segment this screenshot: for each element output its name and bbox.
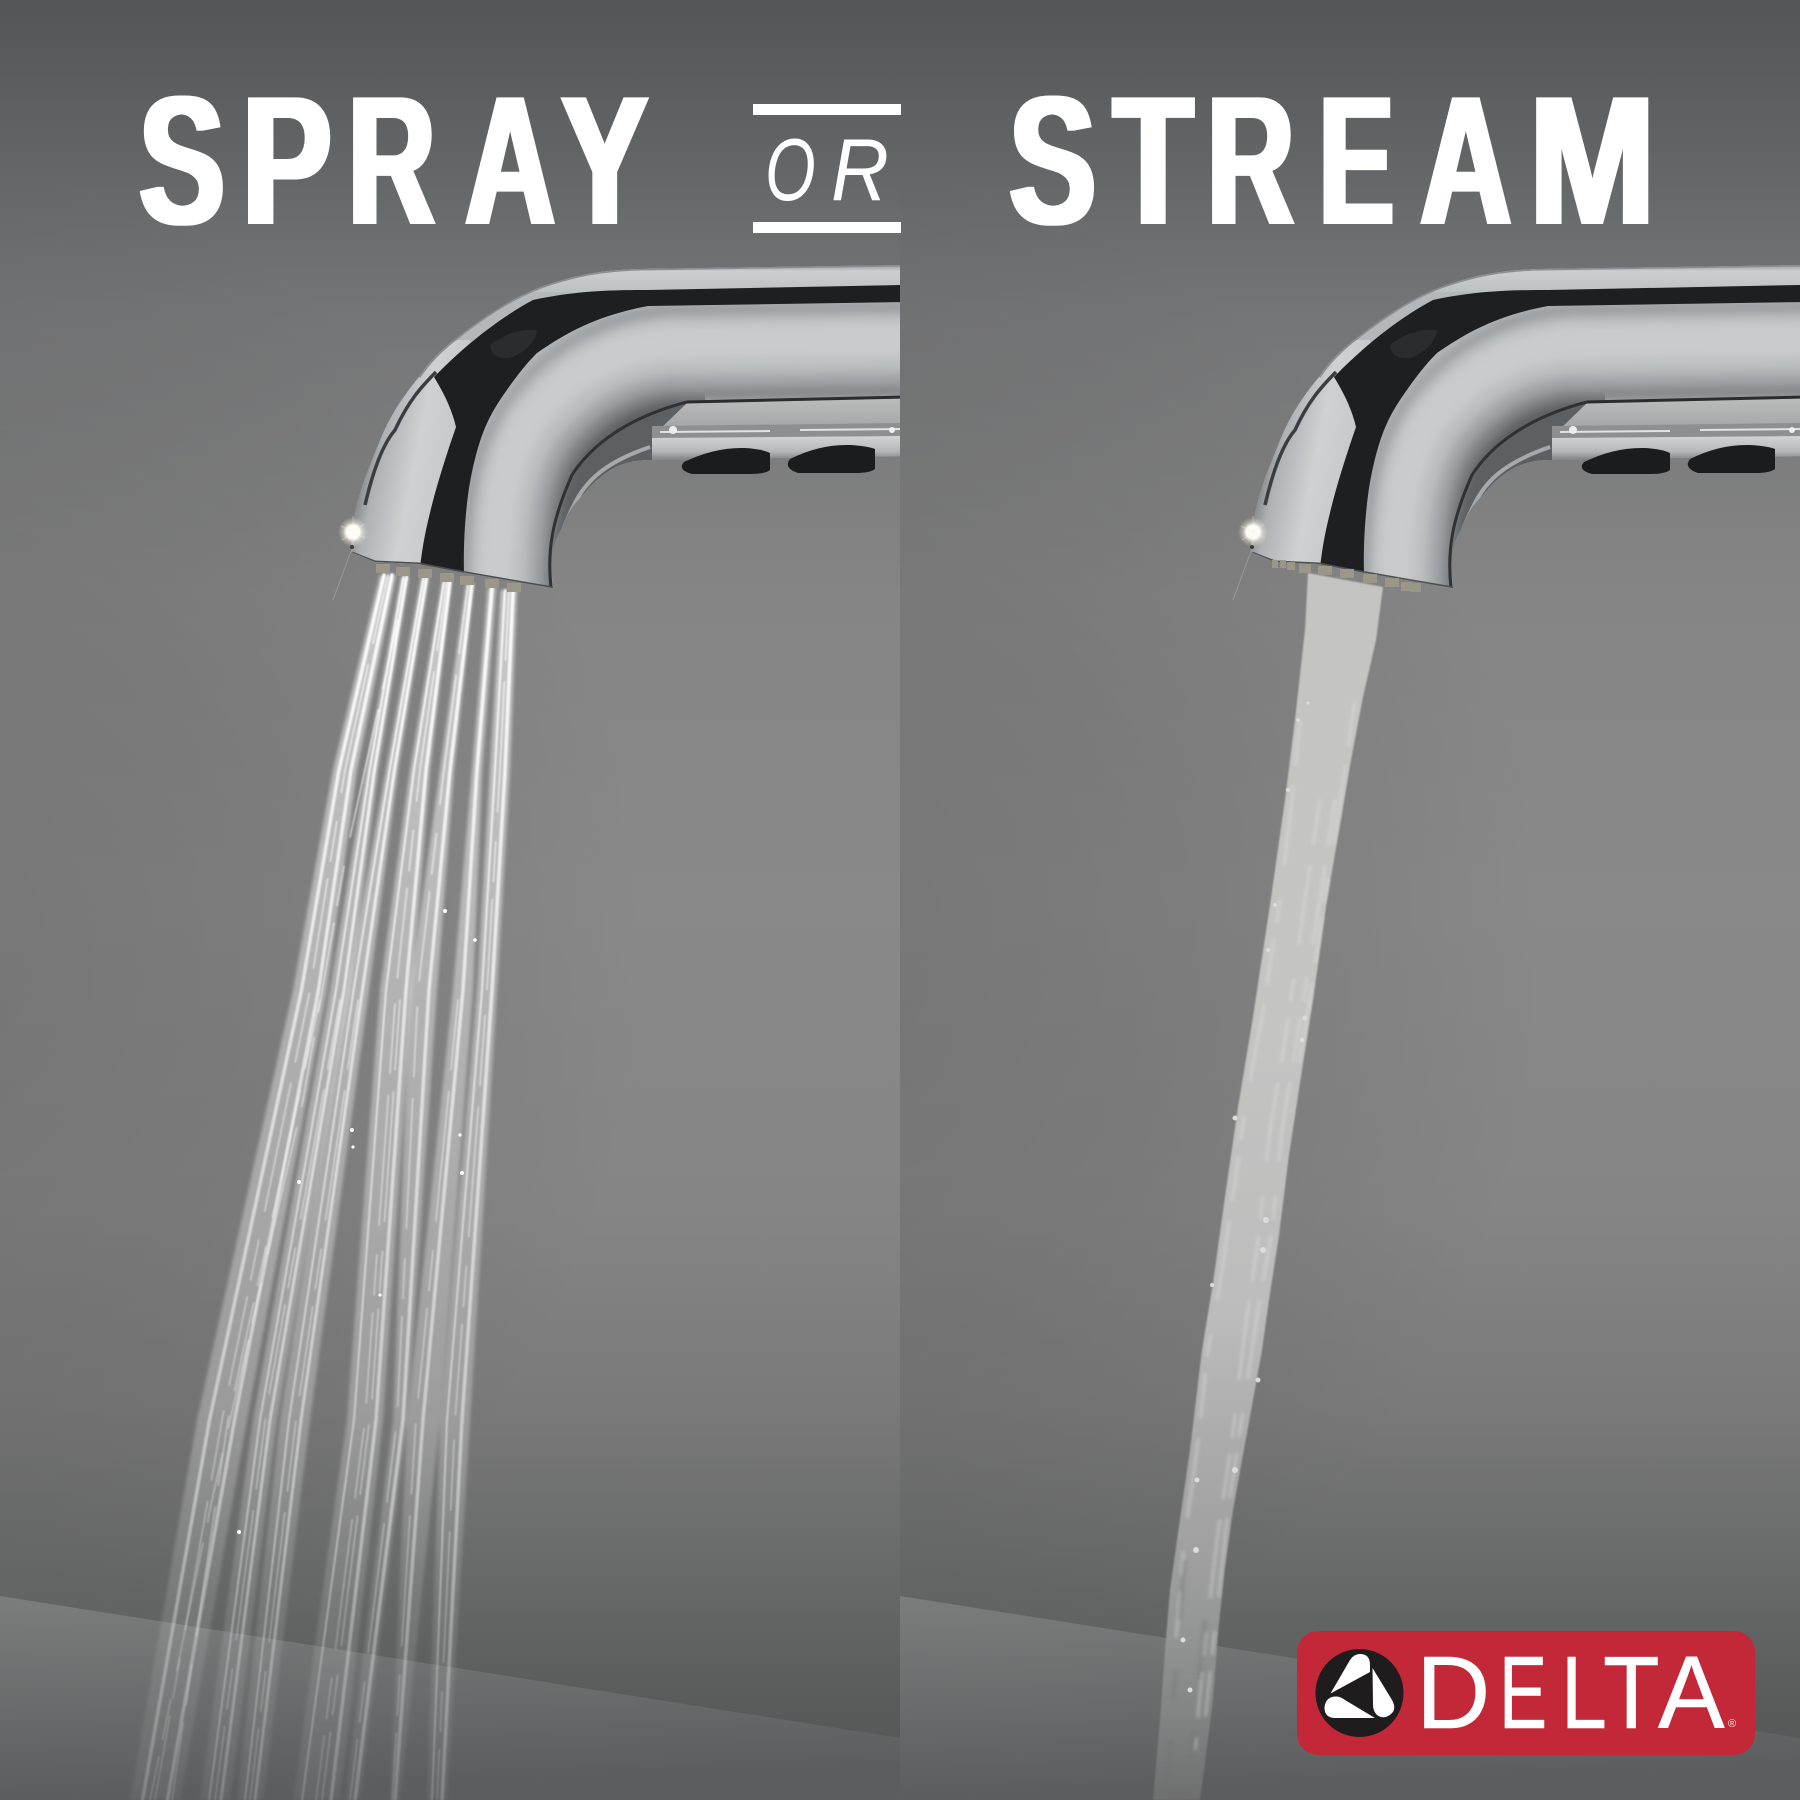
title: SPRAY [139,57,650,263]
faucet spout, left [332,265,900,600]
title: STREAM: M [1529,57,1655,263]
wordmark: DELTA: A [1658,1635,1725,1750]
wordmark: DELTA: D [1416,1635,1490,1750]
title: STREAM [1009,57,1655,263]
faucet spout, right [1233,260,1800,630]
title: STREAM: S [1009,57,1096,263]
wordmark: DELTA: ® [1728,1718,1736,1730]
title: SPRAY: P [242,57,332,263]
wordmark: DELTA: L [1561,1635,1607,1750]
wall and countertop background [900,0,1800,1800]
title connector: OR between two rules: R [831,120,889,219]
wordmark: DELTA: E [1499,1635,1547,1750]
logo: Delta red badge [1297,1631,1755,1755]
panel: stream (right half) [900,0,1800,1800]
wall and countertop background [0,0,900,1800]
title connector: OR between two rules: O [764,120,815,219]
title: SPRAY: A [465,57,555,263]
stream water column [1153,573,1383,1800]
title: STREAM: R [1207,57,1294,263]
title: STREAM: A [1420,57,1511,263]
wordmark: DELTA [1416,1635,1736,1750]
title: SPRAY: R [348,57,435,263]
title connector: OR between two rules [753,104,901,233]
nozzle tips, left [376,564,521,592]
title: SPRAY: Y [561,57,648,263]
wordmark: DELTA: T [1603,1635,1660,1750]
panel: spray (left half) [0,0,950,1800]
nozzle tips, right [1272,560,1421,592]
icon: Delta triangle mark [1316,1649,1404,1737]
title: STREAM: T [1113,57,1193,263]
title: STREAM: E [1319,57,1394,263]
spray water: seven jets [130,575,517,1800]
title: SPRAY: S [139,57,225,263]
